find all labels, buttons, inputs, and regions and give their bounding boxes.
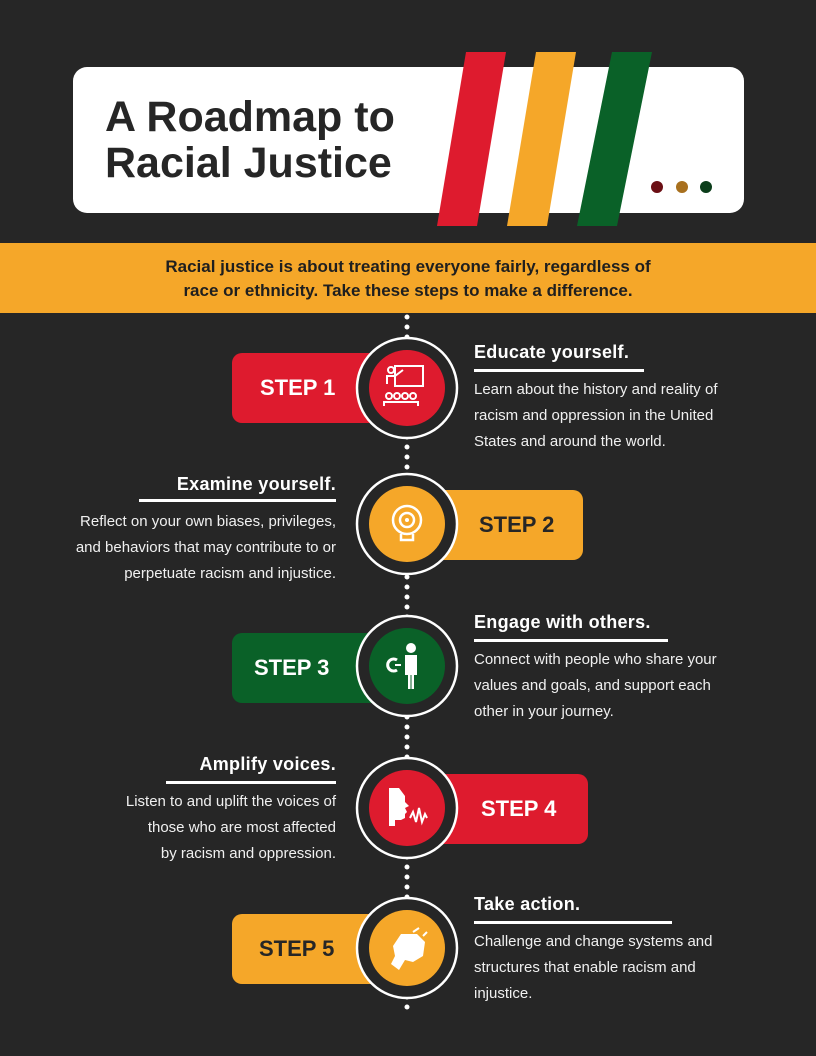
title xyxy=(105,93,395,187)
step 4 text: Amplify voices. xyxy=(199,754,336,774)
intro band: Racial justice is about treating everyone fairly, regardless of xyxy=(165,257,651,276)
step 3 text: Engage with others. xyxy=(474,612,651,632)
step 1 text: Educate yourself. xyxy=(474,342,629,362)
step 3 pill: STEP 3 xyxy=(254,655,329,680)
decorative stripes xyxy=(437,52,712,226)
intro band xyxy=(0,243,816,313)
intro band: race or ethnicity. Take these steps to make a difference. xyxy=(183,281,633,300)
step 5 pill xyxy=(232,914,382,984)
title banner xyxy=(73,67,744,213)
step 5 text: structures that enable racism and xyxy=(474,959,696,976)
step 3 text: other in your journey. xyxy=(474,703,614,720)
step 4 text xyxy=(126,754,336,862)
title: Racial Justice xyxy=(105,139,392,187)
step 2 text: and behaviors that may contribute to or xyxy=(76,539,336,556)
step 3 icon xyxy=(356,614,458,718)
step 4 pill: STEP 4 xyxy=(481,796,556,821)
step 5 text: Take action. xyxy=(474,894,580,914)
step 5 text: Challenge and change systems and xyxy=(474,933,712,950)
step 4 pill xyxy=(430,774,588,844)
step 4 icon xyxy=(356,756,458,860)
step 5 text: injustice. xyxy=(474,985,532,1002)
step 2 pill xyxy=(430,490,583,560)
step 1 pill: STEP 1 xyxy=(260,375,335,400)
step 5 pill: STEP 5 xyxy=(259,936,334,961)
step 5 text xyxy=(474,894,712,1002)
step 3 text: Connect with people who share your xyxy=(474,651,717,668)
step 1 text: States and around the world. xyxy=(474,433,666,450)
step 1 icon xyxy=(356,336,458,440)
step 1 text xyxy=(474,342,718,450)
step 2 pill: STEP 2 xyxy=(479,512,554,537)
step 3 text: values and goals, and support each xyxy=(474,677,711,694)
step 1 pill xyxy=(232,353,382,423)
step 4 text: by racism and oppression. xyxy=(161,845,336,862)
step 1 text: Learn about the history and reality of xyxy=(474,381,718,398)
step 2 text xyxy=(76,474,336,582)
step 2 text: Examine yourself. xyxy=(177,474,336,494)
step 4 text: Listen to and uplift the voices of xyxy=(126,793,336,810)
step 3 text xyxy=(474,612,717,720)
dotted timeline xyxy=(404,314,410,1010)
step 2 text: Reflect on your own biases, privileges, xyxy=(80,513,336,530)
title: A Roadmap to xyxy=(105,93,395,141)
step 2 icon xyxy=(356,472,458,576)
step 3 pill xyxy=(232,633,382,703)
step 4 text: those who are most affected xyxy=(148,819,336,836)
step 5 icon xyxy=(356,896,458,1000)
step 1 text: racism and oppression in the United xyxy=(474,407,713,424)
step 2 text: perpetuate racism and injustice. xyxy=(124,565,336,582)
